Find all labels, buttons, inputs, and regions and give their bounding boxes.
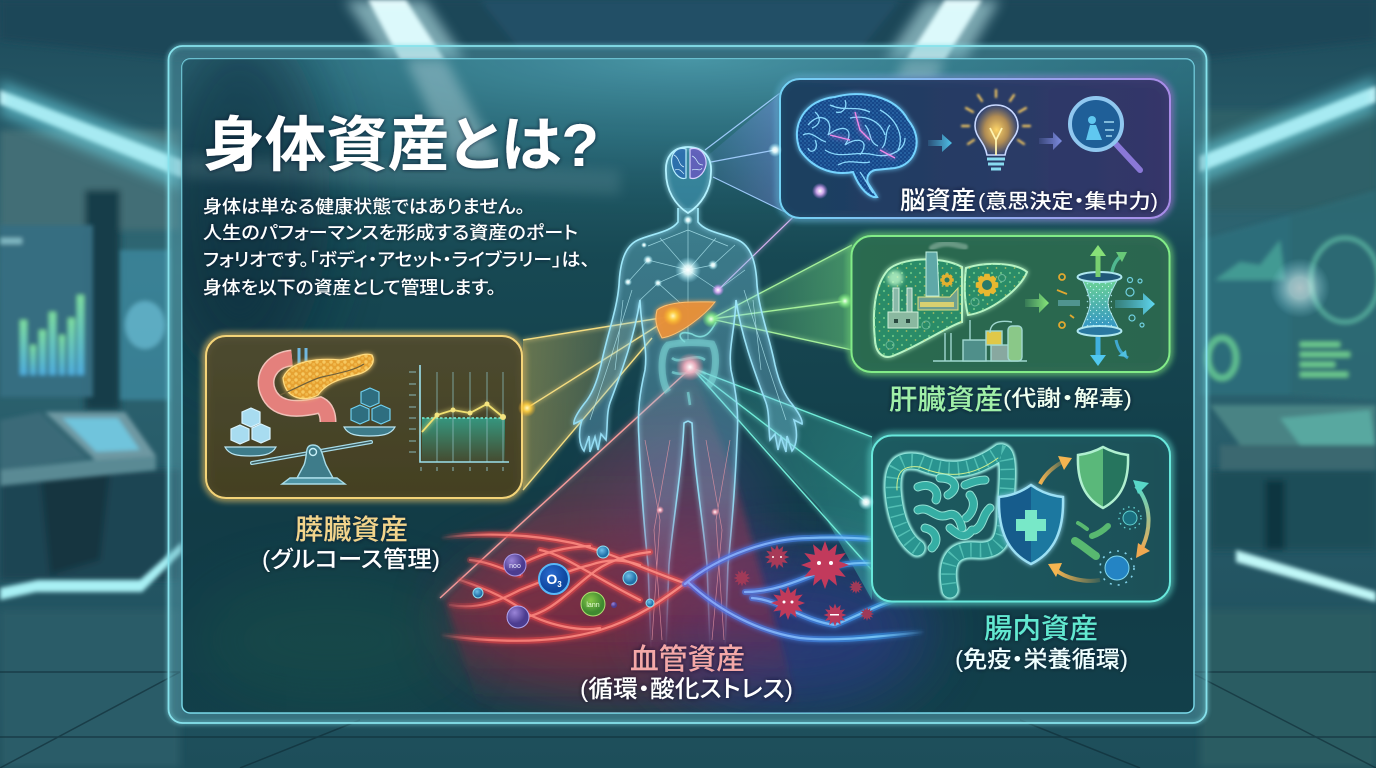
liver in body bbox=[656, 302, 715, 338]
pancreas node bbox=[518, 399, 536, 417]
intro text block bbox=[203, 197, 590, 298]
floor lines bbox=[0, 672, 1376, 768]
arrow bbox=[1025, 293, 1049, 313]
chart: glucose line bbox=[409, 365, 509, 471]
gut node bbox=[858, 494, 874, 510]
glass panel frame bbox=[168, 46, 1206, 723]
light strips bbox=[0, 0, 1376, 602]
icon: liver with factory bbox=[874, 244, 1027, 361]
molecule bubbles: O bbox=[546, 571, 557, 587]
icon: brain bbox=[797, 94, 917, 197]
intro text block: フォリオです。「ボディ・アセット・ライブラリー」は、 bbox=[203, 249, 590, 270]
beam: brain bbox=[705, 84, 820, 290]
red arteries bbox=[440, 535, 692, 641]
organ nodes bbox=[663, 306, 720, 381]
label: vascular asset: (循環・酸化ストレス) bbox=[580, 676, 793, 703]
body silhouette bbox=[574, 147, 802, 650]
immune cycle arrows bbox=[1040, 456, 1150, 581]
panel atmosphere bbox=[150, 20, 1194, 710]
beam: pancreas bbox=[523, 316, 673, 490]
right dashboard screens bbox=[1200, 190, 1376, 470]
label: vascular asset bbox=[580, 643, 793, 703]
label: vascular asset: 血管資産 bbox=[630, 643, 745, 676]
liver node bbox=[837, 293, 853, 309]
panel: gut asset bbox=[858, 436, 1170, 672]
icon: blue shield bbox=[999, 485, 1063, 564]
title: 身体資産とは? bbox=[203, 112, 599, 179]
vascular illustration bbox=[440, 535, 925, 641]
label: brain asset: 脳資産 bbox=[900, 187, 976, 215]
beam: vascular bbox=[440, 367, 800, 712]
beam: liver bbox=[711, 245, 852, 350]
icon: sugar cubes bbox=[231, 388, 390, 444]
oxidative stress particles bbox=[734, 541, 874, 626]
molecule bubbles: lann bbox=[586, 602, 600, 609]
label: gut asset: (免疫・栄養循環) bbox=[955, 646, 1128, 672]
label: gut asset: 腸内資産 bbox=[984, 613, 1098, 644]
icon: intestines bbox=[893, 452, 1007, 590]
intro text block: 身体を以下の資産として管理します。 bbox=[203, 278, 496, 298]
label: brain asset: (意思決定・集中力) bbox=[978, 190, 1158, 213]
label: brain asset bbox=[900, 187, 1158, 215]
label: liver asset: (代謝・解毒) bbox=[1003, 386, 1132, 411]
panel: brain asset bbox=[768, 79, 1170, 218]
panel: liver asset bbox=[837, 236, 1170, 415]
mini brain in head bbox=[672, 148, 706, 178]
internal network lines bbox=[590, 218, 786, 640]
arrows around filter bbox=[1058, 245, 1155, 366]
icon: magnifier bbox=[1070, 98, 1140, 170]
stomach and intestine in body bbox=[662, 322, 716, 405]
label: liver asset bbox=[889, 384, 1132, 415]
beam: gut bbox=[692, 368, 887, 600]
bacteria and viruses bbox=[1075, 507, 1141, 585]
label: liver asset: 肝臓資産 bbox=[889, 384, 1003, 415]
panel: pancreas asset bbox=[206, 336, 536, 572]
icon: green shield bbox=[1078, 447, 1128, 508]
icon: detox filter bbox=[1057, 245, 1155, 366]
intro text block: 身体は単なる健康状態ではありません。 bbox=[203, 197, 525, 217]
intro text block: 人生のパフォーマンスを形成する資産のポート bbox=[203, 223, 578, 243]
label: pancreas asset: (グルコース管理) bbox=[262, 546, 440, 572]
icon: pancreas and duodenum bbox=[266, 348, 373, 422]
molecule bubbles bbox=[473, 546, 654, 628]
blue veins bbox=[685, 537, 925, 639]
arrow bbox=[928, 134, 952, 152]
brain node bbox=[768, 143, 828, 199]
molecule bubbles: noo bbox=[509, 563, 521, 570]
label: pancreas asset: 膵臓資産 bbox=[295, 514, 408, 545]
connector beams from body organs to asset panels bbox=[440, 84, 887, 712]
label: pancreas asset bbox=[262, 514, 440, 572]
molecule bubbles: 3 bbox=[557, 580, 562, 589]
icon: balance scale bbox=[225, 427, 395, 484]
left dashboard screens bbox=[0, 225, 170, 486]
human body figure bbox=[574, 147, 802, 650]
icon: light bulb bbox=[962, 90, 1030, 169]
arrow bbox=[1039, 132, 1062, 150]
label: gut asset bbox=[955, 613, 1128, 672]
